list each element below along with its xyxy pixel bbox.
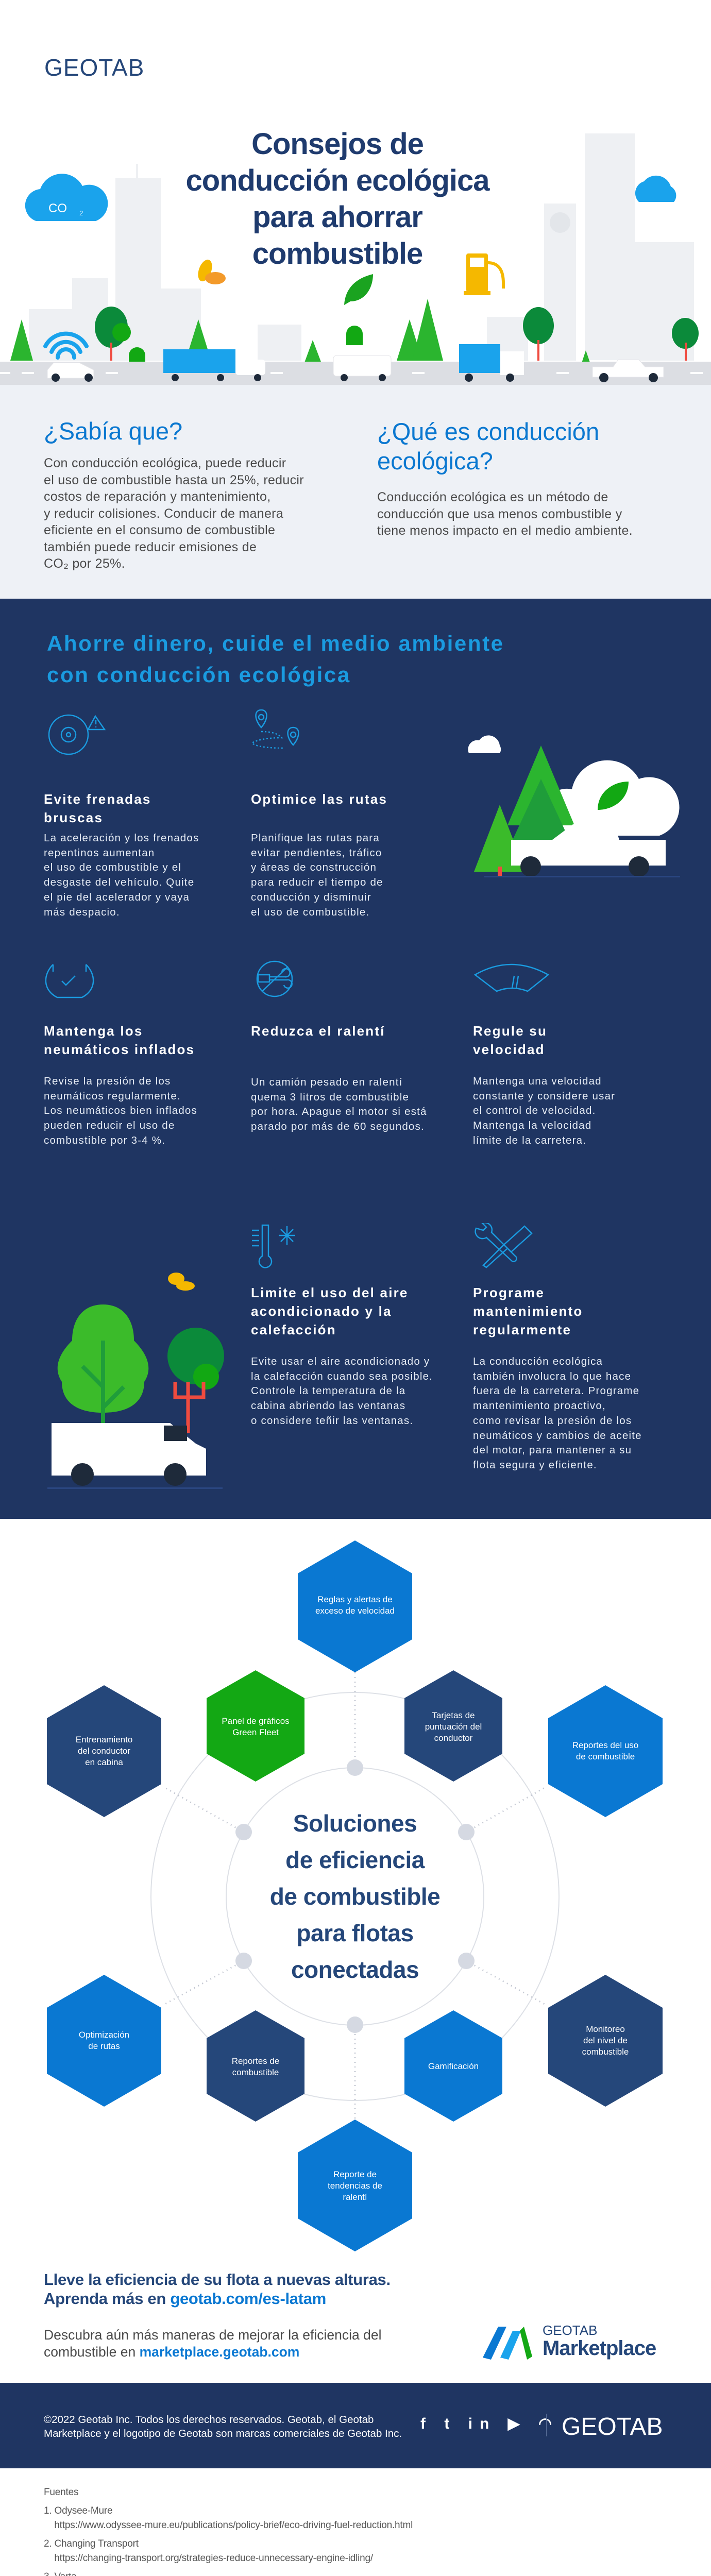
tip: velocidad: límite de la carretera. xyxy=(473,1134,586,1146)
tip: neumaticos: Revise la presión de los xyxy=(44,1075,171,1087)
sources: 2. Changing Transport xyxy=(44,2538,139,2549)
heading: que es: ecológica? xyxy=(377,447,493,474)
center title xyxy=(270,1810,440,1983)
diagram: fuel efficiency solutions xyxy=(47,1540,663,2251)
section: intro xyxy=(0,385,711,599)
icon: tools xyxy=(475,1223,533,1268)
tip: frenadas: más despacio. xyxy=(44,906,120,918)
sources xyxy=(44,2487,413,2576)
footer logo: GEOTAB xyxy=(562,2413,663,2441)
icon: brake xyxy=(48,714,106,755)
hex: monitoreo: combustible xyxy=(582,2047,629,2057)
tip: velocidad: Mantenga una velocidad xyxy=(473,1075,602,1087)
tip: mantenimiento: regularmente xyxy=(473,1322,571,1337)
tip: velocidad: Mantenga la velocidad xyxy=(473,1120,591,1131)
hex: reportes combustible xyxy=(207,2010,304,2122)
tip: neumaticos: combustible por 3-4 %. xyxy=(44,1134,165,1146)
hex: entrenamiento: del conductor xyxy=(78,1746,130,1756)
text: did you know xyxy=(44,456,304,571)
tip: aire acondicionado: la calefacción cuando sea posible. xyxy=(251,1370,433,1382)
copyright: Marketplace y el logotipo de Geotab son marcas comerciales de Geotab Inc. xyxy=(44,2428,402,2439)
title xyxy=(185,127,490,270)
panel: tips dark section: del motor, para mantener a su xyxy=(473,1444,632,1456)
cloud CO2 xyxy=(25,174,108,221)
tip: rutas: conducción y disminuir xyxy=(251,891,371,903)
copyright xyxy=(44,2414,402,2439)
hex: reportes combustible: combustible xyxy=(232,2067,279,2077)
icon: route xyxy=(252,709,299,749)
cloud CO2: 2 xyxy=(79,209,83,217)
tip: frenadas: el pie del acelerador y vaya xyxy=(44,891,190,903)
hex: optimizacion: de rutas xyxy=(88,2041,120,2051)
tip: velocidad: velocidad xyxy=(473,1042,545,1057)
center title: Soluciones xyxy=(293,1810,417,1837)
tip: frenadas xyxy=(44,714,199,918)
center title: de combustible xyxy=(270,1883,440,1910)
heading: ¿Sabía que?: ¿Sabía que? xyxy=(44,417,182,445)
tip: mantenimiento: también involucra lo que hace xyxy=(473,1370,631,1382)
text: definition: conducción que usa menos combustible y xyxy=(377,507,622,521)
heading: ahorre dinero: Ahorre dinero, cuide el medio ambiente xyxy=(47,631,504,655)
leaf xyxy=(344,274,373,305)
hex: green fleet xyxy=(207,1670,304,1782)
tip: rutas: Planifique las rutas para xyxy=(251,832,380,844)
marketplace text xyxy=(44,2327,381,2360)
tip: mantenimiento: fuera de la carretera. Programe xyxy=(473,1385,639,1397)
tip: frenadas: repentinos aumentan xyxy=(44,847,155,859)
tip: neumaticos: Los neumáticos bien inflados xyxy=(44,1105,197,1116)
text: definition: tiene menos impacto en el medio ambiente. xyxy=(377,523,633,538)
center title: para flotas xyxy=(296,1920,414,1946)
heading: que es: ¿Qué es conducción xyxy=(377,418,599,445)
tip: mantenimiento: neumáticos y cambios de aceite xyxy=(473,1430,642,1442)
hex: green fleet: Green Fleet xyxy=(232,1727,279,1737)
social icons: f t in ▶ ◠ xyxy=(420,2415,559,2432)
hex: ralenti: ralentí xyxy=(343,2192,367,2202)
tip: rutas: y áreas de construcción xyxy=(251,861,377,873)
heading: ahorre dinero: con conducción ecológica xyxy=(47,663,351,687)
tip: aire acondicionado: calefacción xyxy=(251,1322,336,1337)
text: did you know: eficiente en el consumo de combustible xyxy=(44,523,275,537)
tip: aire acondicionado: Evite usar el aire acondicionado y xyxy=(251,1355,430,1367)
hex: optimizacion xyxy=(47,1975,161,2107)
logo: marketplace: GEOTAB xyxy=(543,2323,597,2338)
hex: optimizacion: Optimización xyxy=(79,2030,129,2040)
text: did you know: CO₂ por 25%. xyxy=(44,556,125,571)
tip: mantenimiento: La conducción ecológica xyxy=(473,1355,603,1367)
tip: frenadas: La aceleración y los frenados xyxy=(44,832,199,844)
tip: velocidad: Regule su xyxy=(473,1023,547,1039)
icon: idle xyxy=(257,960,293,997)
tip: neumaticos: neumáticos inflados xyxy=(44,1042,195,1057)
illustration: trees and pickup xyxy=(468,735,680,877)
tip: ralenti: quema 3 litros de combustible xyxy=(251,1091,409,1103)
tip: velocidad: constante y considere usar xyxy=(473,1090,615,1102)
hex: monitoreo xyxy=(548,1975,663,2107)
tip: ralenti: Reduzca el ralentí xyxy=(251,1023,385,1039)
hex: gamificacion: Gamificación xyxy=(428,2061,479,2071)
hex: entrenamiento: Entrenamiento xyxy=(76,1735,132,1744)
tip: aire acondicionado: cabina abriendo las ventanas xyxy=(251,1400,405,1412)
logo: marketplace xyxy=(483,2323,656,2360)
heading: ahorre dinero xyxy=(47,631,504,687)
hex: tarjetas: conductor xyxy=(434,1733,473,1743)
tip: neumaticos: Mantenga los xyxy=(44,1023,143,1039)
hex: monitoreo: Monitoreo xyxy=(586,2024,625,2034)
hex: tarjetas: puntuación del xyxy=(425,1722,482,1732)
icon: tire xyxy=(45,964,94,998)
illustration: van and trees xyxy=(47,1273,224,1489)
cloud CO2: CO xyxy=(48,201,67,215)
tip: mantenimiento xyxy=(473,1223,642,1471)
tip: ralenti xyxy=(251,960,427,1132)
cta text xyxy=(44,2270,391,2308)
cta text: Aprenda más en geotab.com/es-latam xyxy=(44,2290,326,2308)
hex: entrenamiento xyxy=(47,1685,161,1817)
copyright: ©2022 Geotab Inc. Todos los derechos reservados. Geotab, el Geotab xyxy=(44,2414,374,2426)
tip: velocidad: el control de velocidad. xyxy=(473,1105,596,1116)
icon: thermometer xyxy=(252,1224,295,1268)
logo: GEOTAB: GEOTAB xyxy=(44,54,144,81)
hex: gamificacion xyxy=(404,2010,502,2122)
heading: que es xyxy=(377,418,599,474)
title: combustible xyxy=(252,237,422,270)
icon: speedometer xyxy=(474,963,549,992)
text: did you know: también puede reducir emisiones de xyxy=(44,540,257,554)
text: definition xyxy=(377,490,633,538)
panel: tips dark section: flota segura y eficiente. xyxy=(473,1459,597,1471)
tip: velocidad xyxy=(473,963,615,1146)
tip: aire acondicionado: acondicionado y la xyxy=(251,1303,392,1319)
tip: frenadas: bruscas xyxy=(44,810,103,825)
tip: aire acondicionado: Controle la temperatura de la xyxy=(251,1385,405,1397)
tip: rutas: para reducir el tiempo de xyxy=(251,876,383,888)
center title: conectadas xyxy=(291,1956,419,1983)
tip: aire acondicionado: o considere teñir las ventanas. xyxy=(251,1415,413,1427)
hex: ralenti xyxy=(298,2120,412,2251)
hex: ralenti: Reporte de xyxy=(333,2170,377,2179)
logo: marketplace: Marketplace xyxy=(543,2337,656,2360)
tip: aire acondicionado xyxy=(251,1224,433,1427)
tip: neumaticos xyxy=(44,964,197,1146)
text: did you know: costos de reparación y mantenimiento, xyxy=(44,489,271,504)
tip: frenadas: Evite frenadas xyxy=(44,791,151,807)
hex: reglas: Reglas y alertas de xyxy=(317,1595,393,1604)
hex: tarjetas xyxy=(404,1670,502,1782)
title: Consejos de xyxy=(251,127,424,161)
tip: mantenimiento: mantenimiento proactivo, xyxy=(473,1400,606,1412)
tip: neumaticos: neumáticos regularmente. xyxy=(44,1090,181,1102)
title: conducción ecológica xyxy=(185,164,489,197)
tip: mantenimiento: mantenimiento xyxy=(473,1303,583,1319)
center title: de eficiencia xyxy=(285,1846,425,1873)
hex: reportes uso: de combustible xyxy=(576,1752,635,1761)
tip: ralenti: por hora. Apague el motor si está xyxy=(251,1106,427,1117)
hex: reportes uso xyxy=(548,1685,663,1817)
hex: reglas xyxy=(298,1540,412,1672)
tip: mantenimiento: como revisar la presión de los xyxy=(473,1415,632,1427)
tip: frenadas: desgaste del vehículo. Quite xyxy=(44,876,194,888)
hero illustration xyxy=(0,133,711,385)
text: did you know: Con conducción ecológica, puede reducir xyxy=(44,456,286,470)
tip: aire acondicionado: Limite el uso del aire xyxy=(251,1285,409,1300)
sources: https://changing-transport.org/strategies-reduce-unnecessary-engine-idling/ xyxy=(54,2553,373,2564)
hex: ralenti: tendencias de xyxy=(328,2181,382,2191)
tip: ralenti: Un camión pesado en ralentí xyxy=(251,1076,403,1088)
tip: ralenti: parado por más de 60 segundos. xyxy=(251,1121,425,1132)
footer band xyxy=(0,2383,711,2468)
text: did you know: el uso de combustible hasta un 25%, reducir xyxy=(44,473,304,487)
panel: tips dark section xyxy=(0,599,711,1519)
tip: neumaticos: pueden reducir el uso de xyxy=(44,1120,175,1131)
marketplace text: combustible en marketplace.geotab.com xyxy=(44,2344,299,2360)
fuel pump xyxy=(464,253,503,295)
tip: rutas: evitar pendientes, tráfico xyxy=(251,847,382,859)
hex: reportes combustible: Reportes de xyxy=(232,2056,279,2066)
hex: reglas: exceso de velocidad xyxy=(315,1606,395,1616)
sources: https://www.odyssee-mure.eu/publications/policy-brief/eco-driving-fuel-reduction.html xyxy=(54,2520,413,2531)
tip: rutas xyxy=(251,709,387,918)
hex: reportes uso: Reportes del uso xyxy=(572,1740,638,1750)
sources: Fuentes xyxy=(44,2487,78,2498)
hex: monitoreo: del nivel de xyxy=(583,2036,628,2045)
tip: rutas: el uso de combustible. xyxy=(251,906,369,918)
hex: entrenamiento: en cabina xyxy=(85,1757,123,1767)
butterfly xyxy=(195,258,226,284)
tip: mantenimiento: Programe xyxy=(473,1285,545,1300)
hex: green fleet: Panel de gráficos xyxy=(222,1716,290,1726)
sources: 1. Odysee-Mure xyxy=(44,2505,112,2516)
tip: rutas: Optimice las rutas xyxy=(251,791,387,807)
tip: frenadas: el uso de combustible y el xyxy=(44,861,181,873)
title: para ahorrar xyxy=(252,200,422,234)
text: definition: Conducción ecológica es un método de xyxy=(377,490,608,504)
cta text: Lleve la eficiencia de su flota a nuevas alturas. xyxy=(44,2270,391,2289)
text: did you know: y reducir colisiones. Conducir de manera xyxy=(44,506,283,520)
hex: tarjetas: Tarjetas de xyxy=(432,1710,475,1720)
marketplace text: Descubra aún más maneras de mejorar la eficiencia del xyxy=(44,2327,381,2343)
